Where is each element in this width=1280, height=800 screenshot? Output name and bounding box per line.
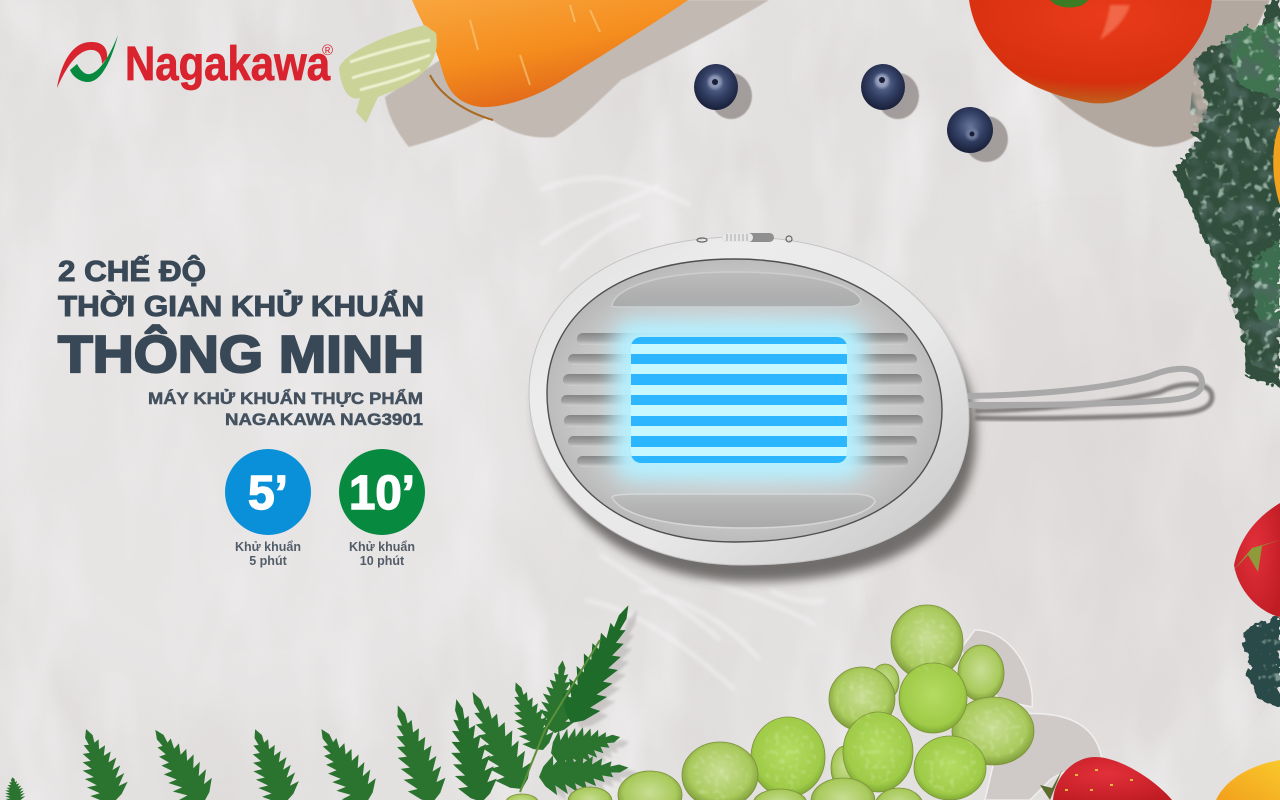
fern shadow [546,601,655,800]
heading line 3: THÔNG MINH [58,325,424,384]
grape shadows [960,630,1102,800]
inner body [547,259,942,542]
slider switch [722,233,774,242]
UV light panel [631,337,847,463]
vent slots [561,333,924,467]
outer ring [529,237,969,565]
badge: 5 minutes: Khử khuẩn [235,540,301,554]
carrot body [412,0,688,107]
product subtitle: NAGAKAWA NAG3901 [225,410,423,429]
badge: 5 minutes: 5 phút [249,554,288,568]
tomato shadow [1050,0,1270,147]
bottom grip [612,494,875,528]
logo swoosh red [57,42,107,88]
blueberry two [861,64,905,110]
device shadow [536,254,976,582]
blueberry shadows [710,73,1008,162]
badge: 5 minutes [225,449,311,568]
blueberries [694,64,1008,162]
badge: 10 minutes: Khử khuẩn [349,540,415,554]
carrot shadow [385,0,769,147]
logo wordmark: Nagakawa [125,38,330,91]
carrot [339,0,688,123]
badge: 5 minutes: 5’ [248,467,288,520]
UV glow [613,319,865,481]
badge: 10 minutes [339,449,425,568]
logo swoosh green [70,35,118,82]
strap shadow [975,384,1212,418]
top grip [612,272,861,307]
blueberry three [947,107,993,153]
strap [966,369,1202,405]
fern leaves [3,596,647,800]
carrot stem [339,25,437,123]
strawberry, right edge [1232,503,1280,617]
product subtitle: MÁY KHỬ KHUẨN THỰC PHẨM [148,389,423,408]
heading line 1: 2 CHẾ ĐỘ [58,254,206,288]
carrot root hair [430,75,493,120]
heading block [58,254,424,384]
product subtitle [148,389,423,429]
registered mark: ® [322,42,333,59]
orange, bottom right [1216,760,1280,800]
mode icon left [697,238,707,242]
grapes [506,605,1034,800]
blueberry one [694,64,738,110]
kale, upper right [1173,0,1280,388]
badge: 10 minutes: 10 phút [360,554,405,568]
product: food sterilizer [529,233,1212,582]
logo: Nagakawa [57,35,333,91]
mode icon right [786,236,792,242]
heading line 2: THỜI GIAN KHỬ KHUẨN [58,289,424,323]
badge: 10 minutes: 10’ [349,467,415,520]
strawberry, bottom [1040,757,1172,800]
tomato [969,0,1212,103]
kale, lower right [1242,617,1280,708]
